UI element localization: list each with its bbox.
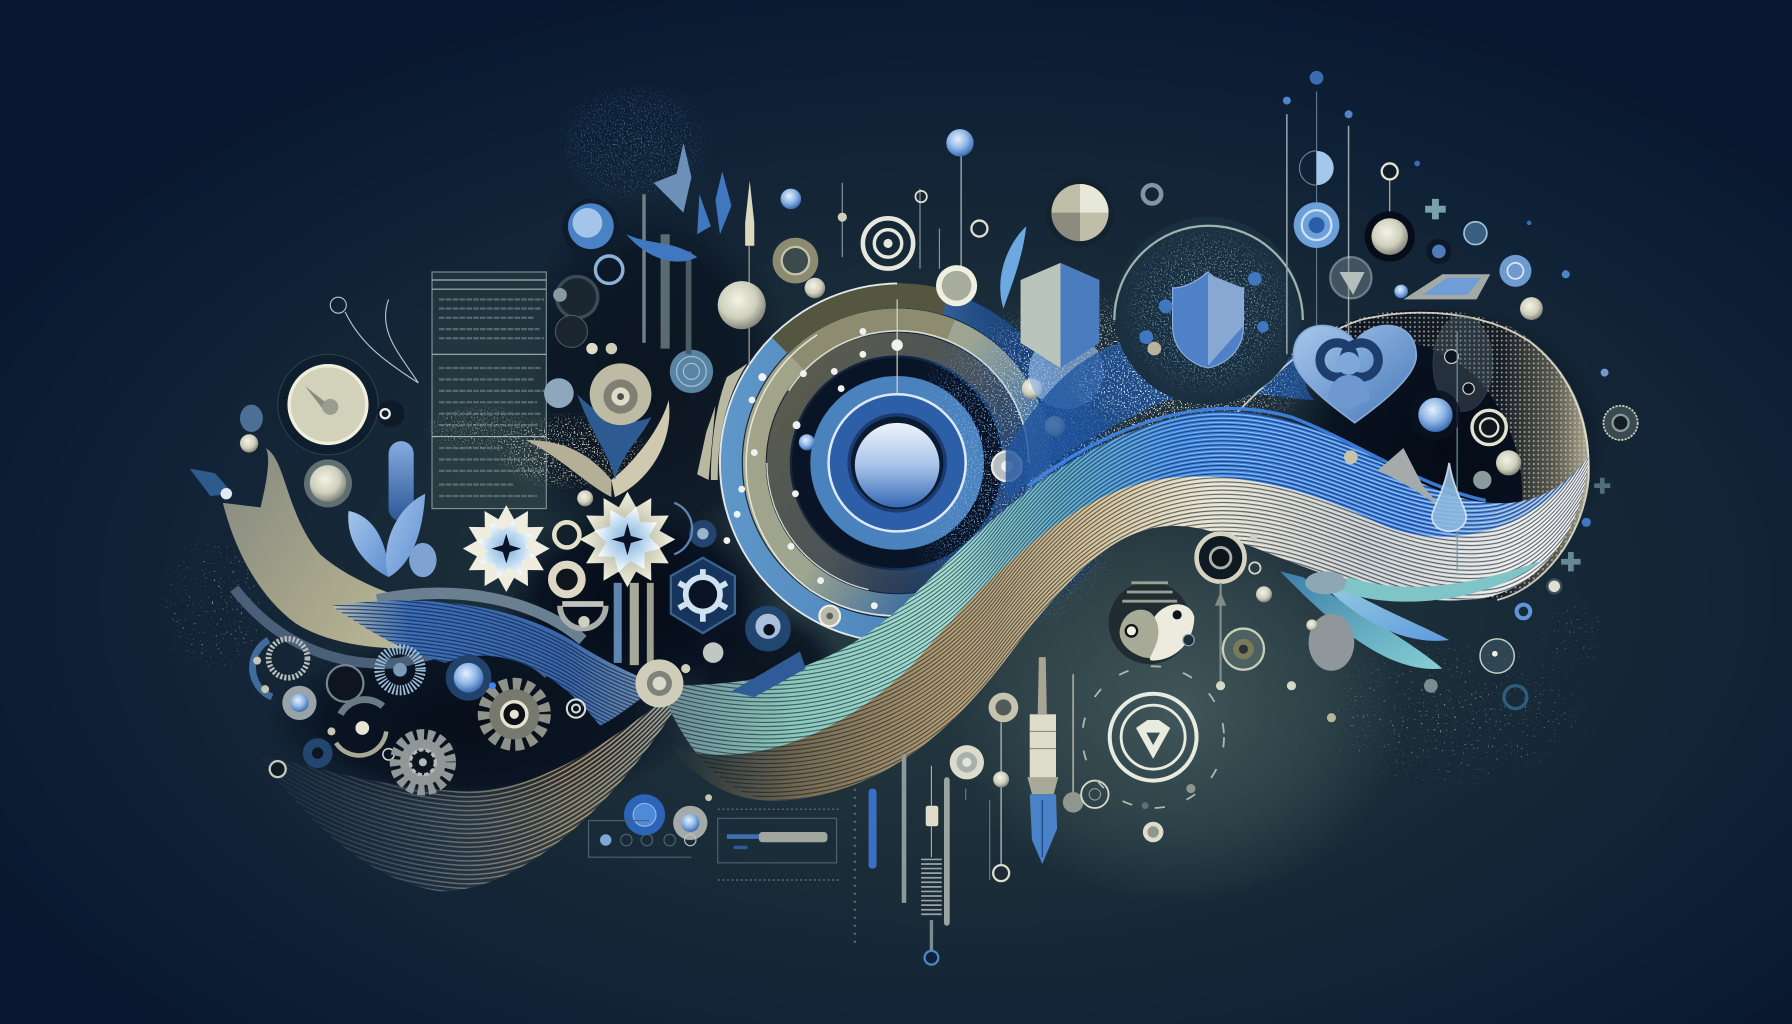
icon: far-right target — [1603, 406, 1638, 440]
icon: blue feather sprig — [1000, 226, 1026, 309]
panel: text lines document — [432, 272, 546, 509]
icon: lower small rings — [1063, 674, 1195, 842]
icon: heart with person — [1293, 325, 1416, 423]
icon: small rings by clock — [377, 400, 405, 427]
icon: lower gear — [395, 735, 450, 790]
icon: cream ball on stem — [1365, 163, 1415, 262]
ribbon: lower left hatch band — [264, 706, 672, 892]
icon: central gear — [485, 682, 544, 744]
icon: water drop — [1432, 463, 1466, 531]
icon: small top ring — [1143, 185, 1161, 203]
ribbon: main wave — [668, 406, 1588, 801]
icon: ring pendants — [950, 693, 1018, 881]
dial: large circle with shield — [1114, 217, 1303, 405]
bottom right speckle cloud — [1303, 594, 1611, 794]
icon: hexagonal gear — [671, 558, 735, 633]
icon: cream ring knob — [936, 265, 977, 306]
icon: leaves — [348, 494, 437, 577]
speckle cloud: top — [554, 80, 714, 206]
icon: blue sphere on ribbon — [446, 655, 491, 701]
translucent sphere and right wave crest — [1006, 320, 1360, 503]
icon: glass ring — [1330, 257, 1371, 298]
icon: eye disc — [681, 606, 806, 697]
icon: top-right lines and half circle — [1283, 71, 1353, 377]
dark backdrop blobs — [263, 194, 1611, 903]
icon: top row balls and targets — [718, 183, 987, 329]
icon: cream feather — [526, 394, 669, 497]
icon: spiral disc — [670, 350, 713, 393]
icon: blue pin ball — [946, 129, 974, 274]
icon: cream spiral knob — [590, 363, 651, 425]
flowers — [463, 492, 675, 592]
flower stems — [614, 583, 654, 665]
icon: olive ring — [1223, 629, 1264, 670]
icon: gray wedge — [1377, 448, 1442, 509]
icon: cream button — [304, 459, 352, 507]
icon: small cluster above knob — [544, 256, 623, 408]
icon: half shield — [1021, 263, 1099, 368]
ribbon: left blue wave — [332, 600, 641, 726]
left speckle cloud — [154, 531, 280, 680]
icon: blue sphere top — [562, 199, 619, 256]
left feather particles — [423, 403, 651, 491]
icon: parallelogram tile — [1403, 274, 1490, 299]
icon: gauge spheres and knobs — [799, 378, 1065, 626]
icon: ribbon knob — [635, 659, 683, 707]
icon: mid rings between flowers — [552, 490, 717, 629]
icon: clock dial — [278, 354, 378, 455]
icon: small swirl — [567, 699, 585, 718]
icon: left blue wedge — [190, 469, 233, 499]
gauge core and sphere — [829, 299, 966, 531]
icon: dark pill with ball — [234, 400, 269, 480]
icon: right mid balls — [1344, 390, 1521, 489]
ribbon: teal feathers — [1280, 560, 1543, 669]
icon: coil probe — [921, 766, 942, 965]
icon: plus signs — [1425, 199, 1610, 571]
icon: blue capsule — [389, 441, 414, 521]
panel: slider box — [718, 809, 841, 880]
left arc tabs of gauge — [697, 363, 747, 480]
icon: metal cone disc — [1046, 178, 1114, 247]
icon: badge with check mark — [1082, 666, 1224, 808]
icon: small right rings — [1504, 518, 1591, 709]
icon: lower-left gears and orbs — [253, 639, 421, 777]
circular gauge: concentric rings — [718, 283, 1120, 642]
particle overlay on gauge — [897, 291, 1246, 634]
icon: glass bubble lower right — [1480, 639, 1514, 673]
icon: blue swirl — [1294, 202, 1339, 248]
icon: yin yang disc — [1109, 582, 1194, 664]
top vertical bars — [642, 181, 754, 366]
icon: scattered lower balls — [1183, 534, 1438, 722]
icon: glass bubble with dots — [1433, 315, 1493, 571]
icon: blue shards — [626, 143, 731, 262]
ribbon: right dotted arc — [1194, 309, 1589, 600]
icon: gray petal shapes — [1305, 571, 1354, 671]
icon: plug with feather — [1027, 657, 1058, 864]
icon: thin pendant curves — [330, 297, 418, 383]
icon: blue and gray buttons — [624, 794, 712, 840]
gauge studs — [723, 328, 903, 609]
panel: indicator row — [589, 821, 696, 857]
ribbon: left tan bands — [223, 448, 583, 674]
icon: target above yin yang — [1197, 534, 1245, 690]
dotted vertical scale — [854, 789, 856, 949]
icon: small right-top orbs — [1394, 161, 1609, 377]
bottom hanging bars — [869, 754, 990, 926]
